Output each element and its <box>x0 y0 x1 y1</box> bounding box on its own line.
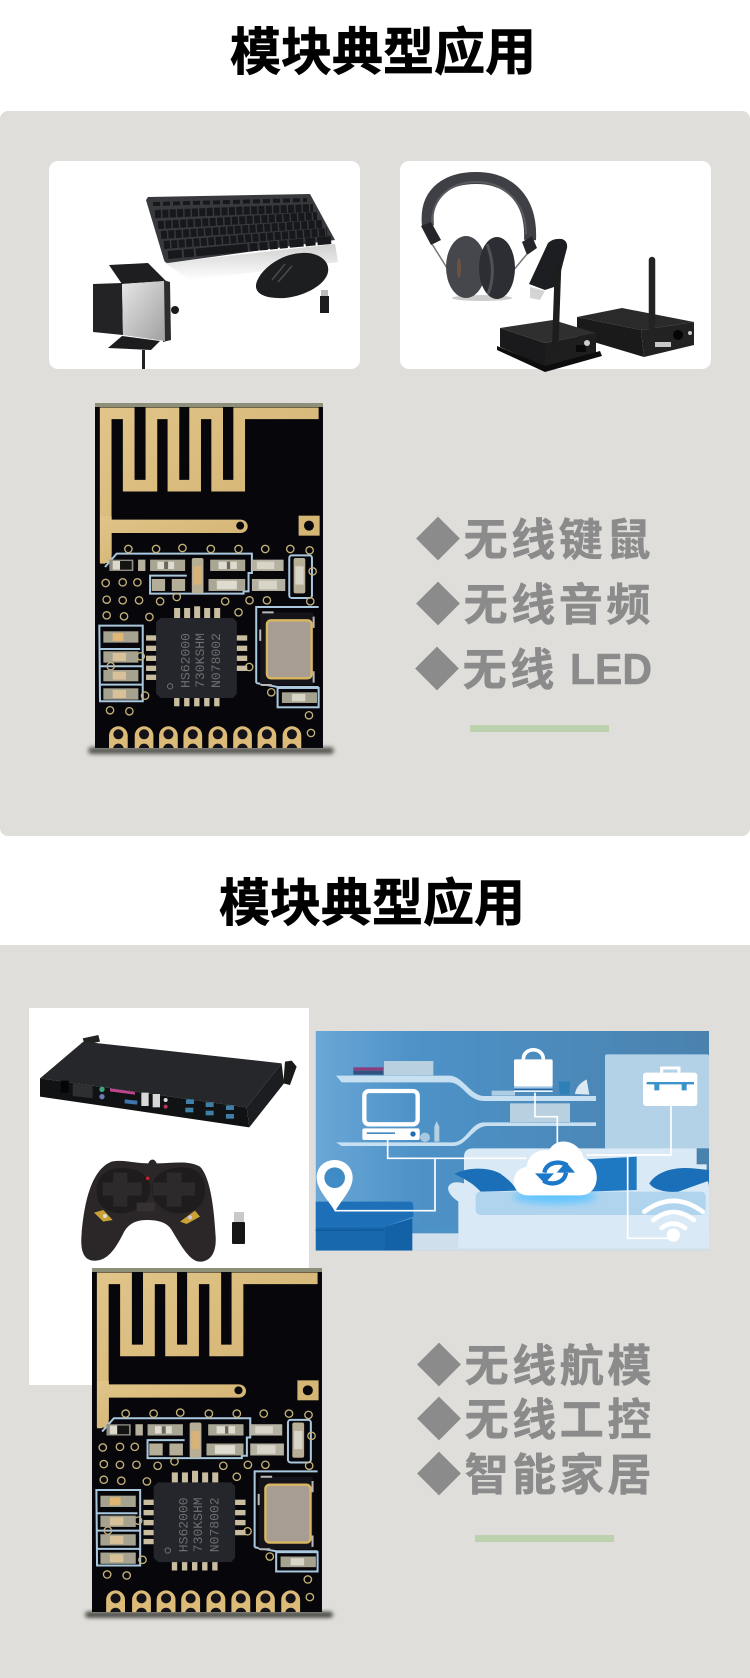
text block: second section application list: ◆无线工控 <box>417 1396 655 1445</box>
icon: wireless gamepad <box>81 1160 216 1262</box>
module photo: NRF PCB, first section <box>88 403 334 754</box>
text block: first section application list: LED <box>570 645 652 694</box>
text block: first section application list: ◆无线键鼠 <box>416 516 654 565</box>
text block: first section application list: ◆无线音频 <box>416 581 654 630</box>
icon: headphones <box>421 178 537 301</box>
icon: wireless mouse <box>256 253 328 298</box>
icon: rack-mount industrial computer <box>40 1035 297 1127</box>
chip marking: N078002 <box>207 1497 222 1552</box>
sofa <box>448 1148 709 1248</box>
card: keyboard, mouse and LED light <box>49 161 360 369</box>
accent bar <box>470 725 609 732</box>
picture: smart home illustration <box>316 1031 709 1251</box>
module photo: NRF PCB, second section <box>85 1268 333 1618</box>
chip marking: 730KSHM <box>193 633 208 688</box>
icon: front wireless box <box>497 268 602 372</box>
icon: lock <box>514 1050 553 1092</box>
icon: USB receiver <box>232 1212 245 1244</box>
card: industrial PC and gamepad <box>29 1008 309 1385</box>
icon: computer <box>362 1091 420 1140</box>
icon: cloud sync <box>513 1142 597 1203</box>
card: headphones and audio transmitters <box>400 161 711 372</box>
shelves with books <box>336 1061 596 1146</box>
panel: second application section background <box>0 945 750 1678</box>
icon: rear wireless box <box>577 260 694 357</box>
text block: second section application list: ◆智能家居 <box>417 1451 655 1500</box>
text block: second section application list <box>417 1342 655 1500</box>
icon: briefcase <box>643 1068 697 1106</box>
title: first section heading: 模块典型应用 <box>230 24 536 81</box>
icon: location pin <box>317 1160 353 1212</box>
chip marking: HS62000 <box>176 1497 191 1552</box>
accent bar <box>475 1535 614 1542</box>
connection lines <box>335 1093 671 1238</box>
chip marking <box>176 1497 222 1552</box>
chip marking: 730KSHM <box>191 1497 206 1552</box>
text block: second section application list: ◆无线航模 <box>417 1342 655 1391</box>
chip marking <box>178 633 224 688</box>
icon: USB audio dongle <box>529 239 567 300</box>
text block: first section application list <box>415 516 654 695</box>
icon: wifi <box>644 1201 703 1242</box>
title: second section heading: 模块典型应用 <box>219 875 525 932</box>
icon: wireless keyboard <box>146 194 338 280</box>
text block: first section application list: ◆无线 <box>415 646 558 695</box>
icon: USB dongle <box>320 290 329 313</box>
chip marking: N078002 <box>209 633 224 688</box>
panel: first application section background <box>0 111 750 836</box>
icon: LED video light <box>93 263 179 369</box>
ottoman <box>316 1202 413 1251</box>
chip marking: HS62000 <box>178 633 193 688</box>
